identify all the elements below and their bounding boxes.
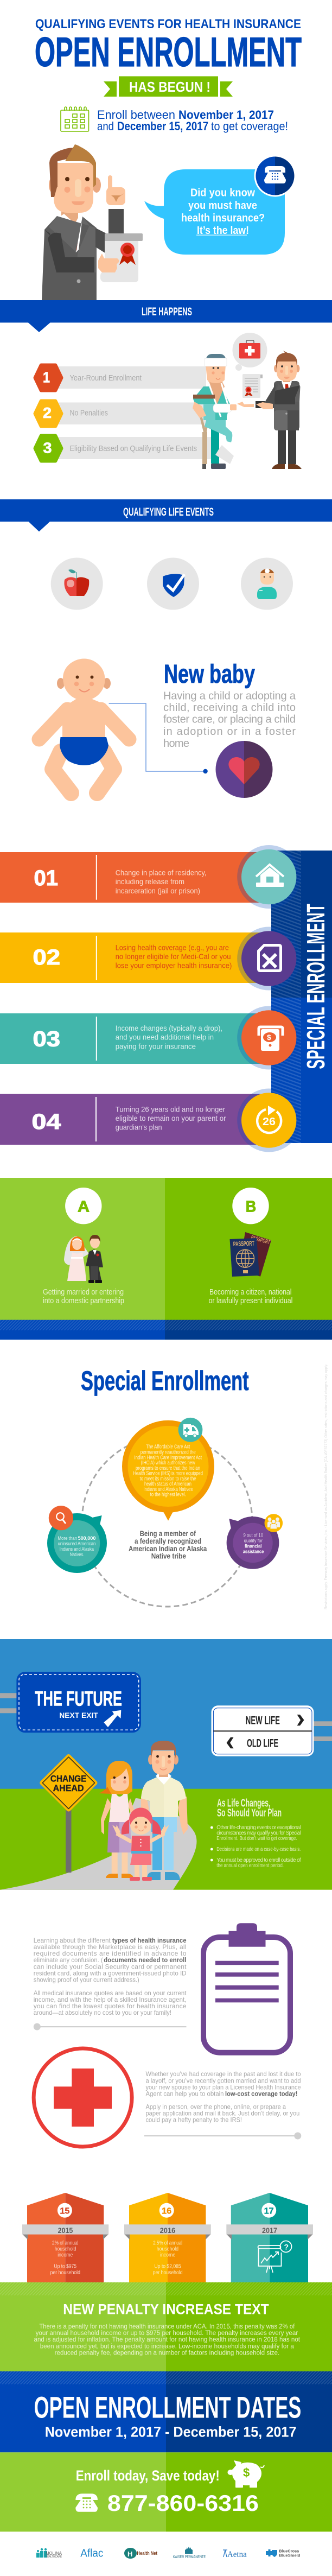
sign: change ahead: AHEAD: [53, 1783, 84, 1793]
logo: kaiser permanente: KAISER PERMANENTE: [173, 2555, 206, 2559]
text block: coverage: Agent can help you to obtain: [145, 2090, 224, 2097]
disclaimer: Restrictions apply. Freeway Insurance Services, Inc. - Licensed as Accident, And Health Broker (CA #0F82773) Other rates, restrictions and charges may apply.: [324, 1364, 328, 1609]
illustration: passports: PASSPORT: [233, 1240, 254, 1248]
icon: phone: [254, 155, 296, 196]
bubble: uninsured: Natives.: [70, 1552, 84, 1558]
event 03: Income changes (typically a drop),: [116, 1024, 222, 1032]
text: event B: [208, 1288, 292, 1305]
callout text: It’s the law!: [197, 225, 249, 237]
text block: new baby: in adoption or in a foster: [163, 726, 296, 738]
text: as life changes: Enrollment. But don’t wait to get coverage.: [216, 1836, 297, 1842]
event 02: no longer eligible for Medi-Cal or you: [116, 952, 231, 961]
heading band: life happens: [0, 300, 332, 332]
event 04: Turning 26 years old and no longer: [116, 1105, 225, 1113]
slider divider: [34, 2023, 187, 2030]
event 02: [0, 927, 301, 990]
text block: types of health insurance: [34, 1937, 187, 2030]
event 01: Change in place of residency,: [116, 868, 206, 877]
item 1: Year-Round Enrollment: [69, 374, 142, 383]
text block: coverage: Whether you’ve had coverage in the past and lost it due to: [145, 2070, 301, 2078]
house 2017: 2017: [262, 2226, 277, 2235]
sign: new life old life: OLD LIFE: [247, 1737, 278, 1749]
icon: red cross: [34, 2048, 132, 2147]
callout text: health insurance?: [181, 212, 265, 224]
illustration: speech bubble with first aid kit: [232, 333, 267, 371]
house 2015: household: [55, 2246, 76, 2252]
house 2017: 17: [264, 2206, 274, 2216]
text block: types of health insurance: eliminate any confusion. (: [34, 1956, 103, 1964]
item 2: No Penalties: [69, 409, 108, 418]
panel: open enrollment dates: November 1, 2017 - December 15, 2017: [45, 2423, 296, 2440]
house 2017: [226, 2193, 313, 2282]
text block: coverage: Apply in person, over the phone, online, or prepare a: [145, 2103, 286, 2111]
icon: piggy bank: $: [243, 2466, 250, 2479]
illustration: baby: [39, 659, 129, 795]
house 2016: per household: [153, 2270, 182, 2276]
item 1: 1: [43, 369, 50, 385]
illustration: couple: [64, 1235, 103, 1283]
center statement: American Indian or Alaska: [129, 1544, 207, 1553]
mother: [99, 1761, 137, 1878]
text: event B: Becoming a citizen, national: [209, 1288, 292, 1297]
event 03: and you need additional help in: [116, 1033, 214, 1042]
text: event B: or lawfully present individual: [208, 1297, 292, 1305]
event 02: Losing health coverage (e.g., you are: [116, 943, 229, 952]
heading band: qualifying life events: [0, 499, 332, 531]
panel: call to action: 877-860-6316: [107, 2490, 259, 2516]
icon: clipboard: [203, 1923, 290, 2053]
icon: apple: [51, 558, 103, 610]
text block: new baby: [163, 660, 296, 750]
icon: ambulance: [178, 1418, 202, 1442]
text block: coverage: low-cost coverage today!: [225, 2090, 297, 2097]
heading: special enrollment: Special Enrollment: [81, 1366, 249, 1396]
panel: call to action: Enroll today, Save today!: [76, 2467, 220, 2484]
bubble: financial assistance: 9 out of 10: [243, 1533, 263, 1539]
event A: A: [78, 1198, 90, 1215]
event 01: 01: [34, 866, 58, 890]
text block: coverage: [144, 2070, 301, 2140]
bubble: indian health care act: programs to ensure that the Indian: [136, 1465, 200, 1471]
logo: molina: MOLINA: [46, 2551, 62, 2556]
logos row: [36, 2547, 301, 2560]
event 03: 03: [33, 1027, 60, 1051]
side panel: special enrollment: SPECIAL ENROLLMENT: [302, 904, 330, 1069]
item 3: [35, 436, 212, 461]
item 2: [35, 401, 206, 426]
house 2015: 2015: [58, 2226, 73, 2235]
illustration: passports: PASSPORT: [250, 1234, 271, 1246]
road: [0, 1798, 197, 1890]
panel: the future: [0, 1639, 332, 1890]
logo: blue cross blue shield: [266, 2549, 301, 2558]
bubble: uninsured: Indians and Alaska: [60, 1546, 94, 1552]
icon: people: [265, 1514, 283, 1532]
sign: new life old life: [212, 1705, 332, 1756]
event 04: [0, 1089, 301, 1152]
event A: [43, 1188, 124, 1305]
house 2016: household: [157, 2246, 178, 2252]
sign: change ahead: CHANGE: [50, 1773, 86, 1784]
icon: search: [49, 1506, 73, 1530]
house 2016: [124, 2193, 211, 2282]
logo: aflac: Aflac: [80, 2548, 103, 2560]
bubble: indian health care act: Indian Health Care Improvement Act: [135, 1455, 202, 1461]
text block: new baby: child, receiving a child into: [163, 702, 296, 714]
event 03: [0, 1006, 301, 1069]
header: [35, 17, 302, 133]
icon: cancelled document: [257, 944, 282, 972]
logo: blue cross blue shield: BlueShield: [279, 2553, 301, 2558]
icon: shield check: [147, 558, 199, 610]
bubble: uninsured: uninsured American: [58, 1541, 95, 1547]
bubble: indian health care act: The Affordable Care Act: [146, 1444, 190, 1450]
icon: house: [256, 865, 284, 887]
center statement: Being a member of: [140, 1529, 196, 1538]
text block: types of health insurance: required documents are identified in advance to: [34, 1950, 187, 1957]
bubble: financial assistance: assistance: [243, 1549, 264, 1555]
heading band: qualifying life events: QUALIFYING LIFE EVENTS: [123, 506, 214, 518]
text: as life changes: the annual open enrollment period.: [216, 1863, 284, 1869]
logo: health net: [124, 2548, 157, 2559]
list: special enrollment events: [0, 845, 301, 1152]
center statement: Native tribe: [151, 1552, 186, 1560]
panel: new penalty increase: reduced penalty fee, depending on a number of factors including household size.: [55, 2350, 279, 2356]
enrollment dates text: November 1, 2017: [178, 108, 274, 122]
bubble: uninsured: 500,000: [78, 1536, 95, 1541]
sign: change ahead: [42, 1756, 95, 1873]
text block: new baby: home: [163, 738, 189, 750]
text block: new baby: New baby: [164, 660, 255, 689]
sign: the future: NEXT EXIT: [59, 1711, 98, 1720]
icon: doctor: [241, 558, 293, 610]
enrollment dates text: and: [97, 119, 114, 133]
illustration: passports: [230, 1232, 271, 1277]
text block: types of health insurance: can include your Social Security card or permanent: [34, 1963, 187, 1970]
bubble: indian health care act: Indians and Alaska Natives: [144, 1487, 193, 1493]
text block: types of health insurance: documents needed to enroll: [104, 1956, 187, 1964]
text block: types of health insurance: income, and with the help of a skilled Insurance agent,: [34, 1996, 186, 2003]
event 04: 04: [31, 1110, 61, 1134]
text: as life changes: You must be approved to enroll outside of: [216, 1857, 301, 1863]
text block: coverage: could pay a hefty penalty to the IRS!: [145, 2116, 242, 2124]
bubble: indian health care act: Health Service (IHS) is more equipped: [133, 1471, 203, 1477]
chart: penalty houses: [22, 2193, 313, 2282]
event 02: lose your employer health insurance): [116, 961, 232, 970]
icon row: life events: [51, 558, 293, 610]
panel: new penalty increase: NEW PENALTY INCREASE TEXT: [63, 2301, 269, 2317]
item 3: 3: [43, 440, 52, 456]
icon: calendar: [61, 107, 89, 131]
panel: events A and B: [0, 1178, 332, 1340]
slider divider: [144, 2132, 301, 2140]
icon: turning 26: 26: [263, 1116, 276, 1128]
icon: turning 26: [257, 1106, 281, 1133]
panel: new penalty increase: and is adjusted for inflation. The penalty amount for not having health insurance in 2018 has not: [34, 2337, 301, 2343]
event B: [208, 1188, 292, 1305]
bubble: indian health care act: health status of American: [144, 1481, 191, 1487]
bubble: financial assistance: financial: [245, 1543, 261, 1549]
bubble: uninsured: More than: [58, 1536, 77, 1541]
text: as life changes: Other life-changing events or exceptional: [216, 1825, 301, 1831]
event 03: paying for your insurance: [116, 1042, 196, 1051]
heading band: life happens: LIFE HAPPENS: [142, 306, 192, 318]
house 2015: 2% of annual: [52, 2241, 78, 2247]
item 2: 2: [43, 404, 52, 421]
house 2015: Up to $975: [54, 2264, 76, 2270]
house 2015: income: [58, 2252, 73, 2258]
house 2015: per household: [50, 2270, 80, 2276]
text: event A: [43, 1288, 124, 1305]
text block: types of health insurance: All medical insurance quotes are based on your current: [34, 1989, 187, 1997]
callout text: Did you know: [190, 187, 255, 199]
event B: B: [246, 1198, 256, 1215]
icon: chart presentation: ?: [284, 2243, 289, 2251]
logo: health net: Health Net: [137, 2550, 157, 2556]
enrollment dates text: to get coverage!: [211, 119, 288, 133]
icon: telephone: [75, 2493, 98, 2512]
logo: molina: [36, 2548, 62, 2559]
panel: open enrollment dates: [0, 2371, 332, 2452]
ribbon: has begun: [104, 76, 233, 97]
event 01: including release from: [116, 877, 184, 886]
text block: types of health insurance: around—at absolutely no cost to you or your family!: [34, 2009, 171, 2016]
panel: new penalty increase: [0, 2282, 332, 2371]
house 2015: [22, 2193, 108, 2282]
text block: coverage: a layoff, or you’ve recently gotten married and want to add: [145, 2077, 301, 2084]
callout text: you must have: [188, 200, 257, 212]
house 2016: 16: [162, 2206, 171, 2216]
bubble: indian health care act: [122, 1418, 214, 1521]
bubble: indian health care act: to meet its mission to raise the: [140, 1476, 196, 1482]
enrollment dates text: [97, 108, 288, 133]
house 2015: 15: [60, 2206, 70, 2216]
text block: types of health insurance: Learning about the different: [34, 1937, 111, 1944]
bubble: indian health care act: to the highest level.: [150, 1492, 186, 1498]
sign: the future: [0, 1672, 141, 1733]
callout text: [181, 187, 265, 237]
text block: types of health insurance: resident card, along with a government-issued photo ID: [34, 1969, 187, 1977]
text block: new baby: foster care, or placing a child: [163, 714, 296, 726]
text block: coverage: your new spouse to your plan a Licensed Health Insurance: [145, 2083, 301, 2091]
bubble: financial assistance: [227, 1514, 283, 1569]
text: event A: Getting married or entering: [43, 1288, 124, 1297]
bubble: financial assistance: qualify for: [244, 1538, 263, 1544]
icon: chart presentation: [258, 2241, 292, 2273]
sign: the future: THE FUTURE: [35, 1688, 122, 1711]
logo: health net: H: [127, 2550, 132, 2558]
house 2016: Up to $2,085: [154, 2264, 181, 2270]
event 04: eligible to remain on your parent or: [116, 1114, 226, 1122]
logo: aetna: Aetna: [227, 2550, 247, 2559]
text block: coverage: paper application and mail it back. Just don’t delay, or you: [145, 2110, 299, 2117]
event 04: guardian’s plan: [116, 1123, 162, 1132]
side panel: special enrollment: [271, 851, 332, 1143]
text: as life changes: So Should Your Plan: [217, 1807, 282, 1819]
item 1: [35, 365, 206, 390]
panel: new penalty increase: been announced yet, but is expected to increase. Low-income households may qualify for a: [40, 2343, 294, 2350]
enrollment dates text: December 15, 2017: [117, 119, 208, 133]
logo: kaiser permanente: [173, 2547, 206, 2559]
panel: call to action: [0, 2452, 332, 2531]
event 02: 02: [33, 946, 60, 969]
list: life happens items: [35, 365, 212, 461]
daughter: [112, 1807, 169, 1881]
panel: new penalty increase: There is a penalty for not having health insurance under ACA. In 2015, this penalty was 2% of: [39, 2324, 295, 2330]
icon: piggy bank: [228, 2460, 264, 2488]
text block: types of health insurance: types of health insurance: [112, 1937, 187, 1944]
text block: types of health insurance: available through the Marketplace is easy. Plus, all: [34, 1943, 186, 1951]
sign: new life old life: NEW LIFE: [246, 1715, 280, 1727]
icon: cash machine: $: [267, 1033, 271, 1042]
connector line: [109, 703, 208, 773]
bubble: uninsured: [47, 1506, 107, 1573]
text: as life changes: As Life Changes,: [217, 1797, 270, 1809]
ribbon: has begun: HAS BEGUN !: [129, 79, 210, 95]
icon: cash machine: [259, 1027, 283, 1051]
illustration: certificate: [242, 374, 263, 398]
icon: heart: [216, 741, 273, 798]
text: as life changes: Decisions are made on a case-by-case basis.: [216, 1847, 301, 1852]
text block: types of health insurance: showing proof of your current address.): [34, 1976, 139, 1983]
logo: molina: HEALTHCARE: [46, 2555, 62, 2559]
center statement: [129, 1529, 207, 1560]
house 2016: 2016: [160, 2226, 175, 2235]
illustration: injured patient: [193, 354, 254, 469]
text block: types of health insurance: you can find the lowest quotes for health insurance: [34, 2002, 187, 2010]
illustration: agent in suit: [256, 351, 302, 469]
enrollment dates text: Enroll between: [97, 108, 175, 122]
text: event A: into a domestic partnership: [43, 1297, 124, 1305]
bubble: indian health care act: (IHCIA) which authorizes new: [141, 1460, 195, 1466]
illustration: businessman with certificate: [42, 144, 143, 300]
house 2016: 2.5% of annual: [153, 2241, 182, 2247]
house 2016: income: [160, 2252, 176, 2258]
text block: new baby: Having a child or adopting a: [163, 690, 296, 702]
father: [141, 1741, 188, 1880]
illustration: family: [99, 1741, 188, 1881]
bubble: indian health care act: permanently reauthorized the: [141, 1449, 196, 1456]
item 3: Eligibility Based on Qualifying Life Events: [69, 445, 197, 453]
event 01: [0, 845, 301, 909]
logo: blue cross blue shield: BlueCross: [279, 2549, 299, 2553]
text: as life changes: circumstances may qualify you for Special: [216, 1830, 301, 1836]
center statement: a federally recognized: [135, 1537, 201, 1545]
text: as life changes: [210, 1797, 301, 1869]
callout: did you know: [144, 155, 296, 255]
panel: new penalty increase: your annual household income or up to $975 per household. The penalty increases every year: [36, 2330, 298, 2337]
event 01: incarceration (jail or prison): [116, 886, 200, 895]
dashed circle diagram: [47, 1418, 283, 1607]
